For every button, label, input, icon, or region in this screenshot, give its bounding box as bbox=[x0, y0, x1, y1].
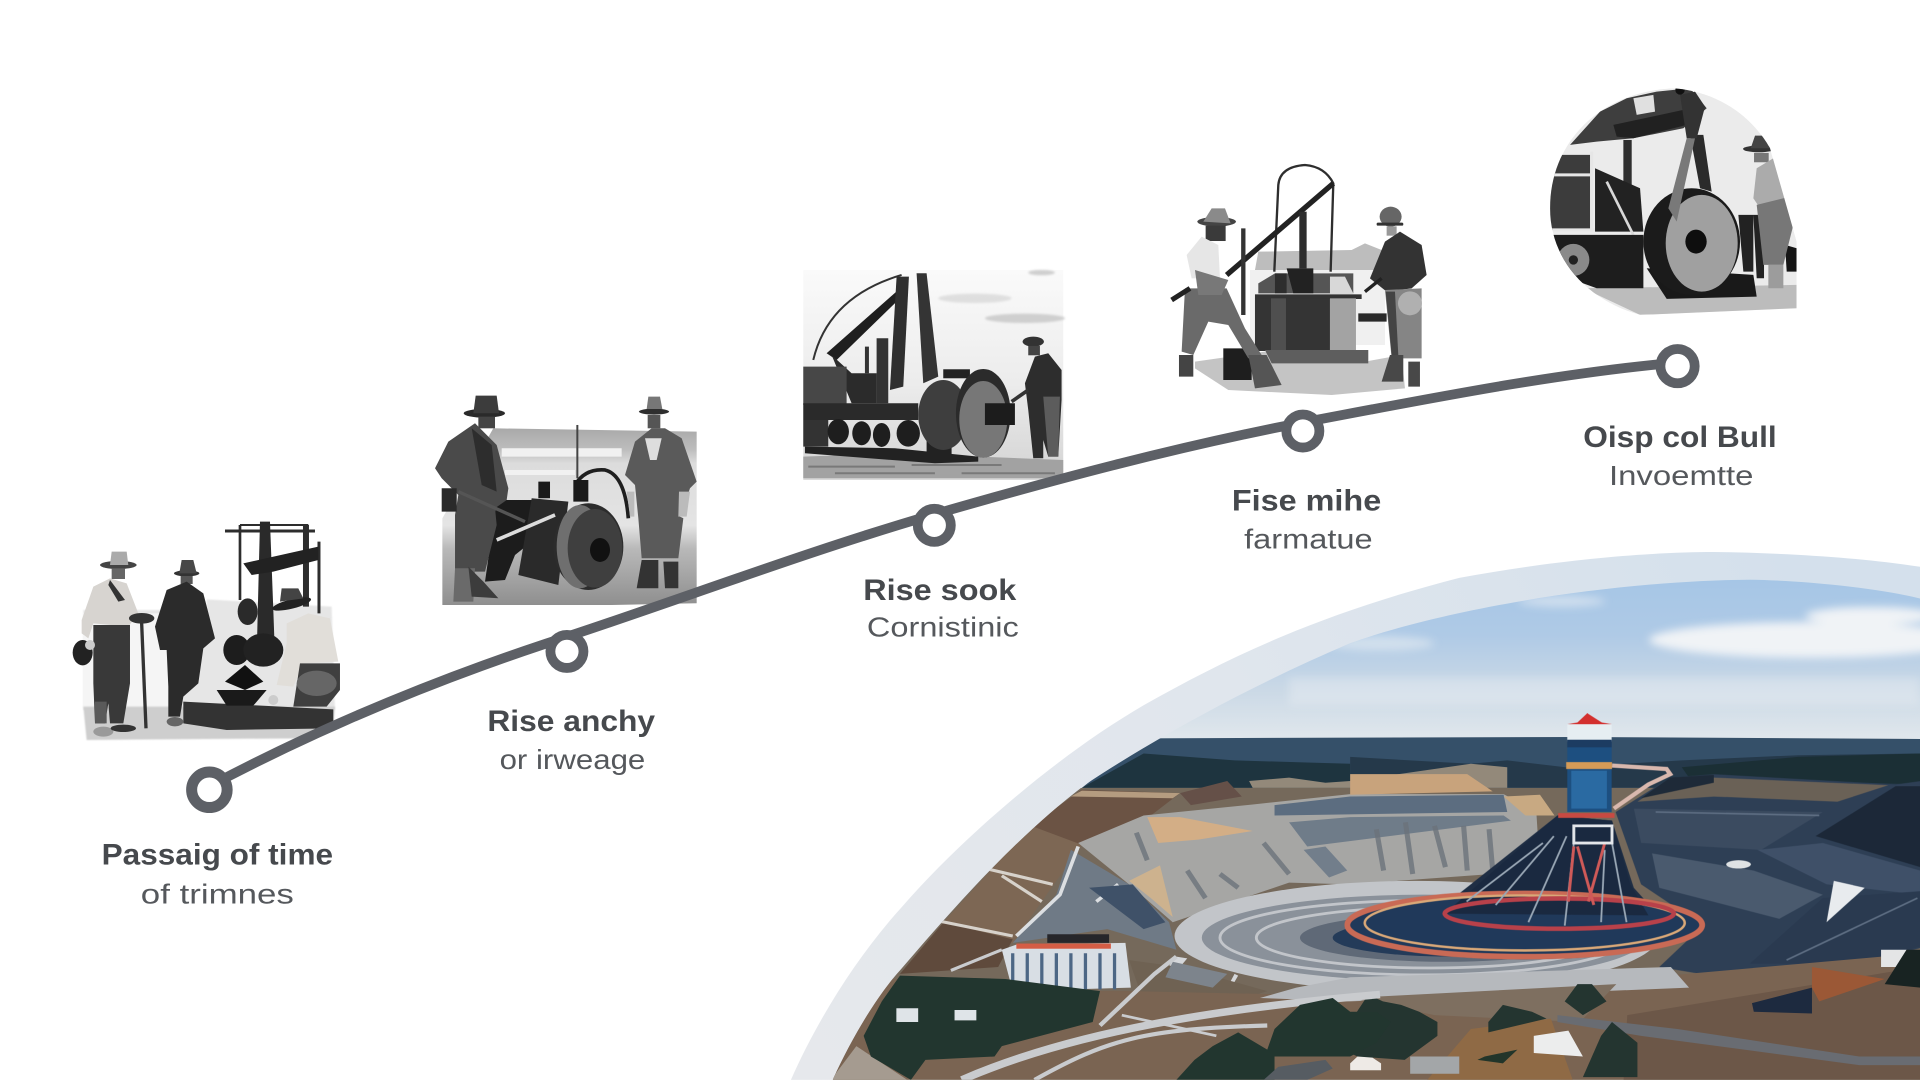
photo 5: circular vignette with flywheel and miner bbox=[1550, 85, 1797, 315]
milestone node 1 bbox=[192, 772, 227, 808]
mine scene bbox=[831, 578, 1920, 1080]
label 3: Rise sook bbox=[863, 574, 1017, 607]
pump bbox=[1223, 165, 1387, 380]
label 4: Fise mihe bbox=[1232, 485, 1381, 518]
label 2 bbox=[487, 705, 656, 775]
label 1: Passaig of time bbox=[102, 838, 333, 871]
dark chute bbox=[1013, 850, 1176, 950]
label 3 bbox=[863, 574, 1019, 643]
label 1 bbox=[102, 838, 333, 910]
label 3: Cornistinic bbox=[867, 612, 1019, 643]
roads bbox=[951, 950, 1380, 1080]
milestone node 3 bbox=[918, 509, 951, 542]
photo 1: three miners at machine bbox=[73, 522, 340, 740]
right dark wall bbox=[1347, 713, 1920, 977]
miner crouching bbox=[268, 588, 340, 707]
label 5 bbox=[1583, 421, 1777, 491]
label 5: Oisp col Bull bbox=[1583, 421, 1777, 454]
pale arc frame bbox=[791, 552, 1920, 1080]
photo 2: two miners with wheel bbox=[435, 396, 697, 605]
brown slopes bbox=[1031, 790, 1180, 845]
engine bbox=[1550, 85, 1757, 299]
milestone node 5 bbox=[1660, 349, 1695, 383]
label 4 bbox=[1232, 485, 1381, 555]
miner middle bbox=[155, 560, 215, 726]
miner bbox=[1012, 337, 1062, 458]
miner bbox=[1738, 136, 1797, 288]
miner left bbox=[73, 552, 154, 737]
miner left bbox=[435, 396, 525, 602]
wheel and pipe bbox=[485, 425, 628, 590]
building bbox=[1002, 943, 1131, 991]
miner right bbox=[625, 397, 697, 588]
conifer stands bbox=[864, 976, 1391, 1080]
label 5: Invoemtte bbox=[1609, 460, 1753, 491]
engine bbox=[803, 273, 1015, 463]
headframe tower bbox=[1397, 815, 1656, 915]
milestone node 2 bbox=[550, 635, 583, 668]
label 2: or irweage bbox=[500, 744, 645, 775]
label 4: farmatue bbox=[1244, 524, 1373, 555]
pit floor swirl bbox=[1175, 881, 1658, 991]
milestone node 4 bbox=[1286, 414, 1319, 448]
label 1: of trimnes bbox=[141, 879, 294, 910]
photo 3: steam drum engine and miner bbox=[803, 270, 1065, 480]
timeline line bbox=[214, 362, 1678, 784]
miner right bbox=[1365, 207, 1427, 387]
photo 4: two miners at pump bbox=[1172, 165, 1427, 395]
grey terraced wall bbox=[1078, 794, 1540, 922]
foreground bbox=[831, 953, 1920, 1080]
panel: modern open-pit mine photo bbox=[791, 552, 1920, 1080]
machine frame bbox=[183, 522, 333, 730]
miner left bbox=[1172, 208, 1282, 388]
label 2: Rise anchy bbox=[487, 705, 656, 738]
